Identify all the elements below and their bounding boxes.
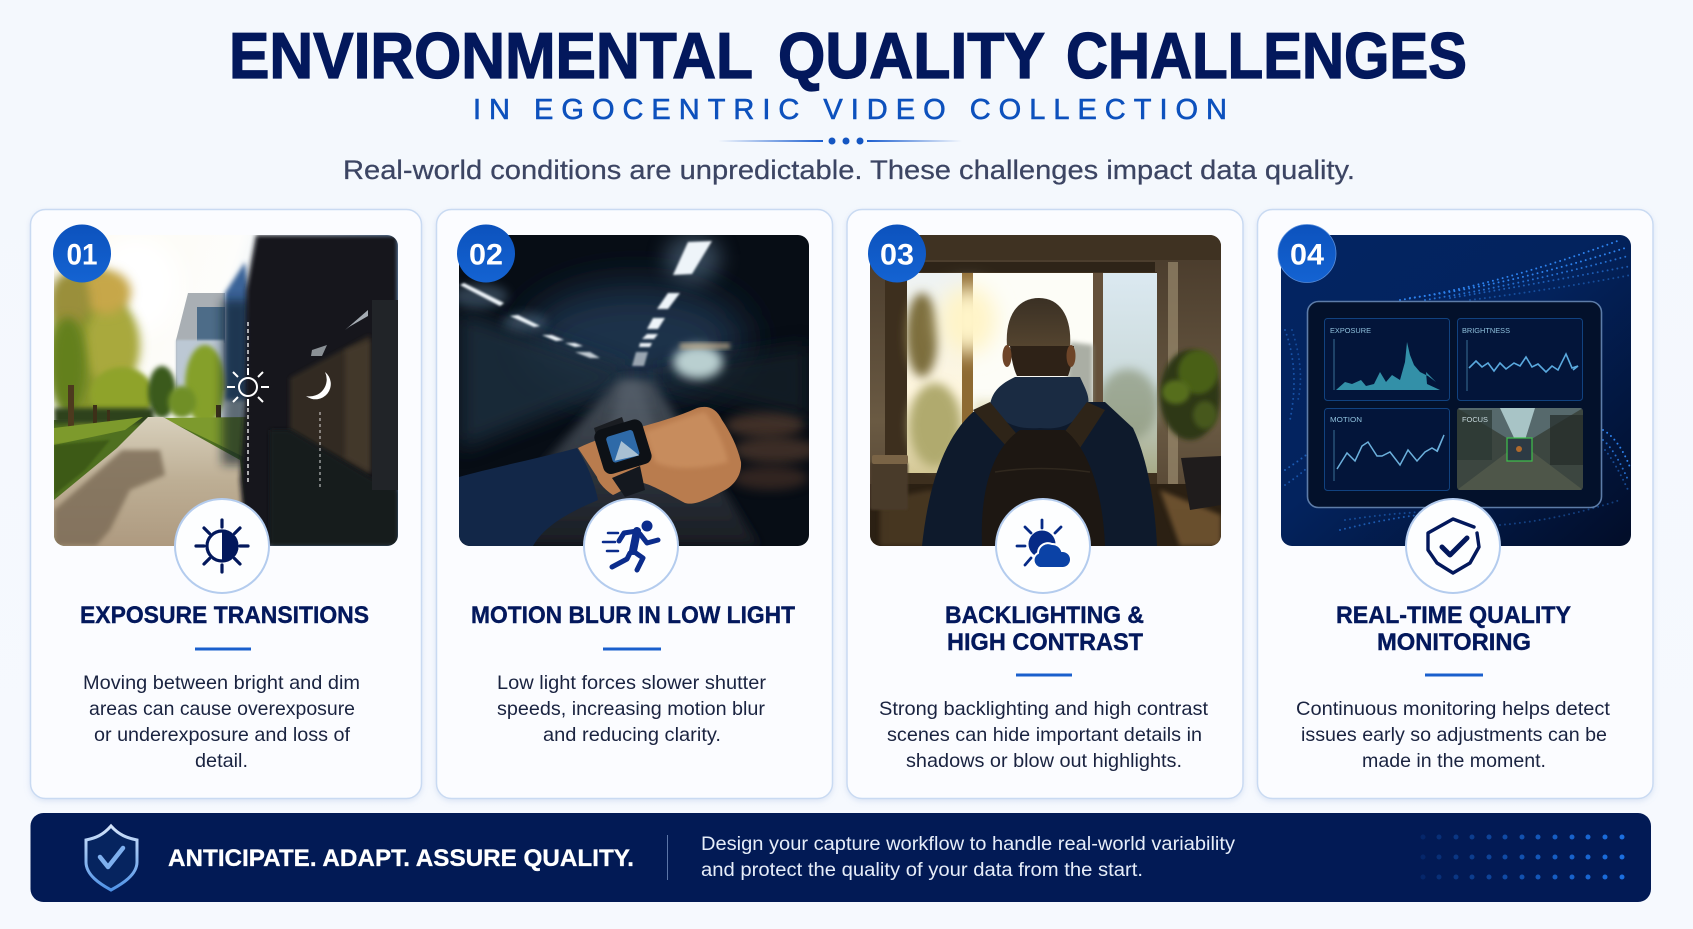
number badge 04: 04 <box>1290 238 1324 272</box>
panel: backlighting and high contrast <box>847 210 1243 798</box>
body text <box>83 672 360 772</box>
accent rule <box>195 648 251 650</box>
armchair <box>870 455 908 510</box>
body text: Low light forces slower shutter <box>497 672 767 694</box>
heading: EXPOSURE TRANSITIONS <box>80 602 369 629</box>
body text: and reducing clarity. <box>543 724 721 746</box>
panel: real-time quality monitoring <box>1258 210 1653 798</box>
number badge 04 <box>1278 224 1336 282</box>
subtitle: IN EGOCENTRIC VIDEO COLLECTION <box>473 94 1227 126</box>
banner text <box>701 834 1236 881</box>
photo: outdoor to indoor transition <box>50 235 398 546</box>
title: QUALITY <box>778 19 1045 92</box>
body text: scenes can hide important details in <box>887 724 1202 746</box>
panel: exposure transitions <box>30 210 422 798</box>
panel: motion blur in low light <box>436 210 832 798</box>
icon: half sun <box>175 499 269 593</box>
heading <box>945 602 1144 656</box>
number badge 02 <box>457 224 515 282</box>
image: focus view: FOCUS <box>1462 415 1488 424</box>
photo: backlit person at window <box>870 235 1221 546</box>
number badge 03 <box>868 224 926 282</box>
plant <box>1160 350 1221 510</box>
number badge 01: 01 <box>66 238 98 272</box>
chart: motion: MOTION <box>1330 415 1362 424</box>
number badge 02: 02 <box>469 238 503 272</box>
accent rule <box>1425 674 1483 676</box>
title <box>229 19 1467 92</box>
body text: detail. <box>195 750 248 772</box>
banner headline: ANTICIPATE. ADAPT. ASSURE QUALITY. <box>168 845 634 872</box>
chart: brightness <box>1458 318 1582 400</box>
body text: shadows or blow out highlights. <box>906 750 1182 772</box>
heading: HIGH CONTRAST <box>947 629 1143 656</box>
body text <box>497 672 767 746</box>
body text: Strong backlighting and high contrast <box>879 698 1209 720</box>
accent rule <box>603 648 661 650</box>
body text: Moving between bright and dim <box>83 672 360 694</box>
chart: exposure <box>1324 318 1450 400</box>
accent rule <box>1016 674 1072 676</box>
heading: MONITORING <box>1377 629 1531 656</box>
chart: motion <box>1324 408 1450 490</box>
image: focus view <box>1457 408 1583 490</box>
title: ENVIRONMENTAL <box>229 19 753 92</box>
body text: areas can cause overexposure <box>89 698 355 720</box>
person silhouette <box>922 298 1157 546</box>
title: CHALLENGES <box>1066 19 1467 92</box>
body text: issues early so adjustments can be <box>1301 724 1607 746</box>
dot pattern <box>1420 834 1624 880</box>
transition symbols <box>227 322 320 487</box>
body text: speeds, increasing motion blur <box>497 698 766 720</box>
icon: running person <box>584 499 678 593</box>
tagline: Real-world conditions are unpredictable. These challenges impact data quality. <box>343 155 1355 185</box>
icon: shield <box>86 826 137 890</box>
heading: MOTION BLUR IN LOW LIGHT <box>471 602 795 629</box>
body text: or underexposure and loss of <box>94 724 351 746</box>
banner text: and protect the quality of your data from the start. <box>701 860 1143 881</box>
divider with dots <box>718 138 962 144</box>
tablet <box>1308 302 1602 508</box>
icon: sun and cloud <box>996 499 1090 593</box>
wrist camera <box>592 417 654 497</box>
number badge 03: 03 <box>880 238 914 272</box>
body text: Continuous monitoring helps detect <box>1296 698 1611 720</box>
photo: monitoring dashboard tablet <box>1281 235 1631 546</box>
number badge 01 <box>53 224 111 282</box>
body text: made in the moment. <box>1362 750 1546 772</box>
chart: brightness: BRIGHTNESS <box>1462 326 1510 335</box>
chart: exposure: EXPOSURE <box>1330 326 1371 335</box>
body text <box>879 698 1209 772</box>
photo: wrist camera in dark corridor <box>452 234 817 546</box>
icon: shield check <box>1406 499 1500 593</box>
banner text: Design your capture workflow to handle real-world variability <box>701 834 1236 855</box>
body text <box>1296 698 1611 772</box>
heading: REAL-TIME QUALITY <box>1336 602 1571 629</box>
heading <box>1336 602 1571 656</box>
heading: BACKLIGHTING & <box>945 602 1144 629</box>
banner <box>30 813 1651 902</box>
